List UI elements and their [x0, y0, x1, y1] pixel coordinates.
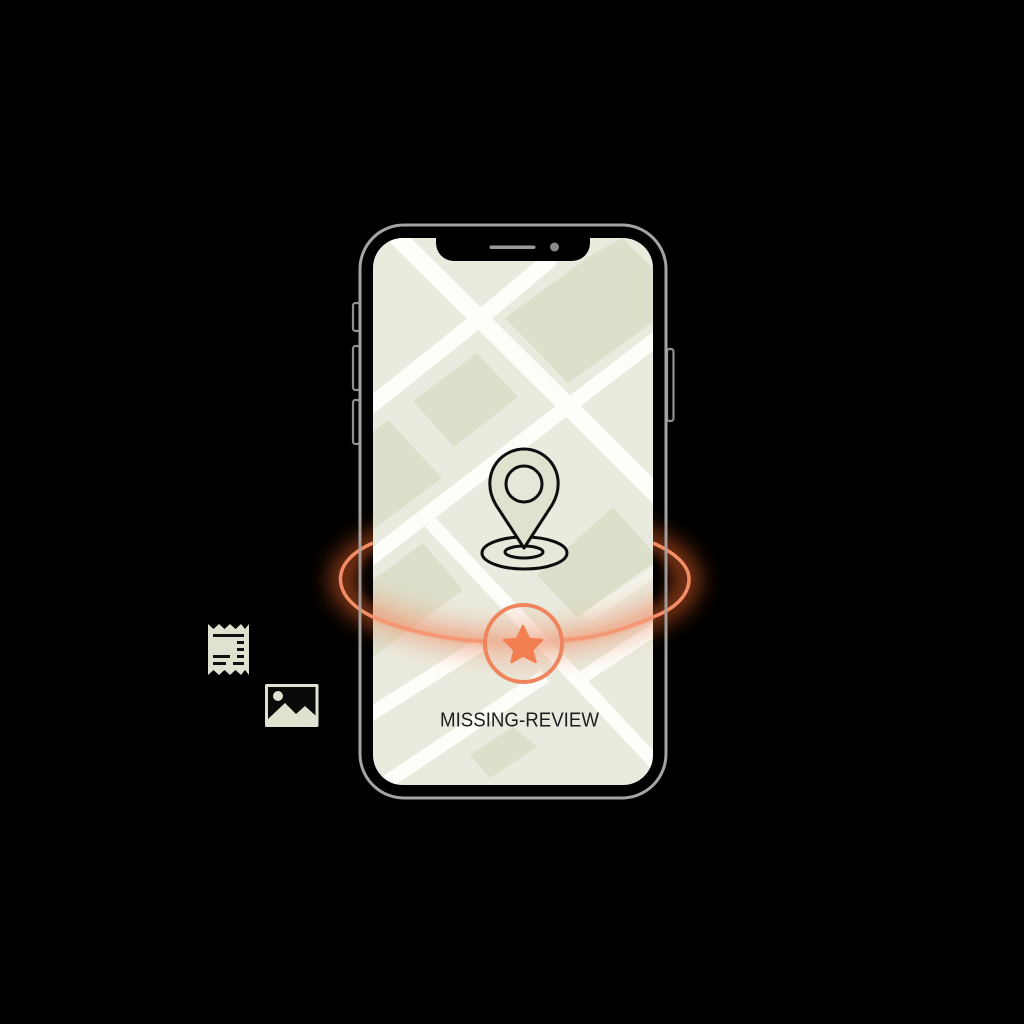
phone frame highlight over ring [360, 530, 666, 640]
glow outside phone [341, 520, 689, 640]
glow on map [360, 604, 666, 643]
pin head [490, 449, 558, 548]
missing review star marker [485, 605, 562, 682]
map roads [368, 232, 660, 788]
map blocks [373, 238, 653, 778]
phone side buttons [353, 303, 674, 444]
dark bezel shading inside ring [363, 552, 663, 604]
icon: image [265, 684, 318, 727]
pin base [482, 537, 567, 569]
map screen [360, 232, 666, 788]
orange orbit ring [340, 543, 689, 642]
phone body [360, 225, 666, 798]
notch camera [550, 242, 559, 252]
label: MISSING-REVIEW [440, 710, 599, 732]
icon: receipt [208, 624, 249, 675]
location pin [482, 449, 567, 569]
infographic: phone map with missing review marker [208, 224, 715, 800]
notch speaker [490, 246, 536, 249]
